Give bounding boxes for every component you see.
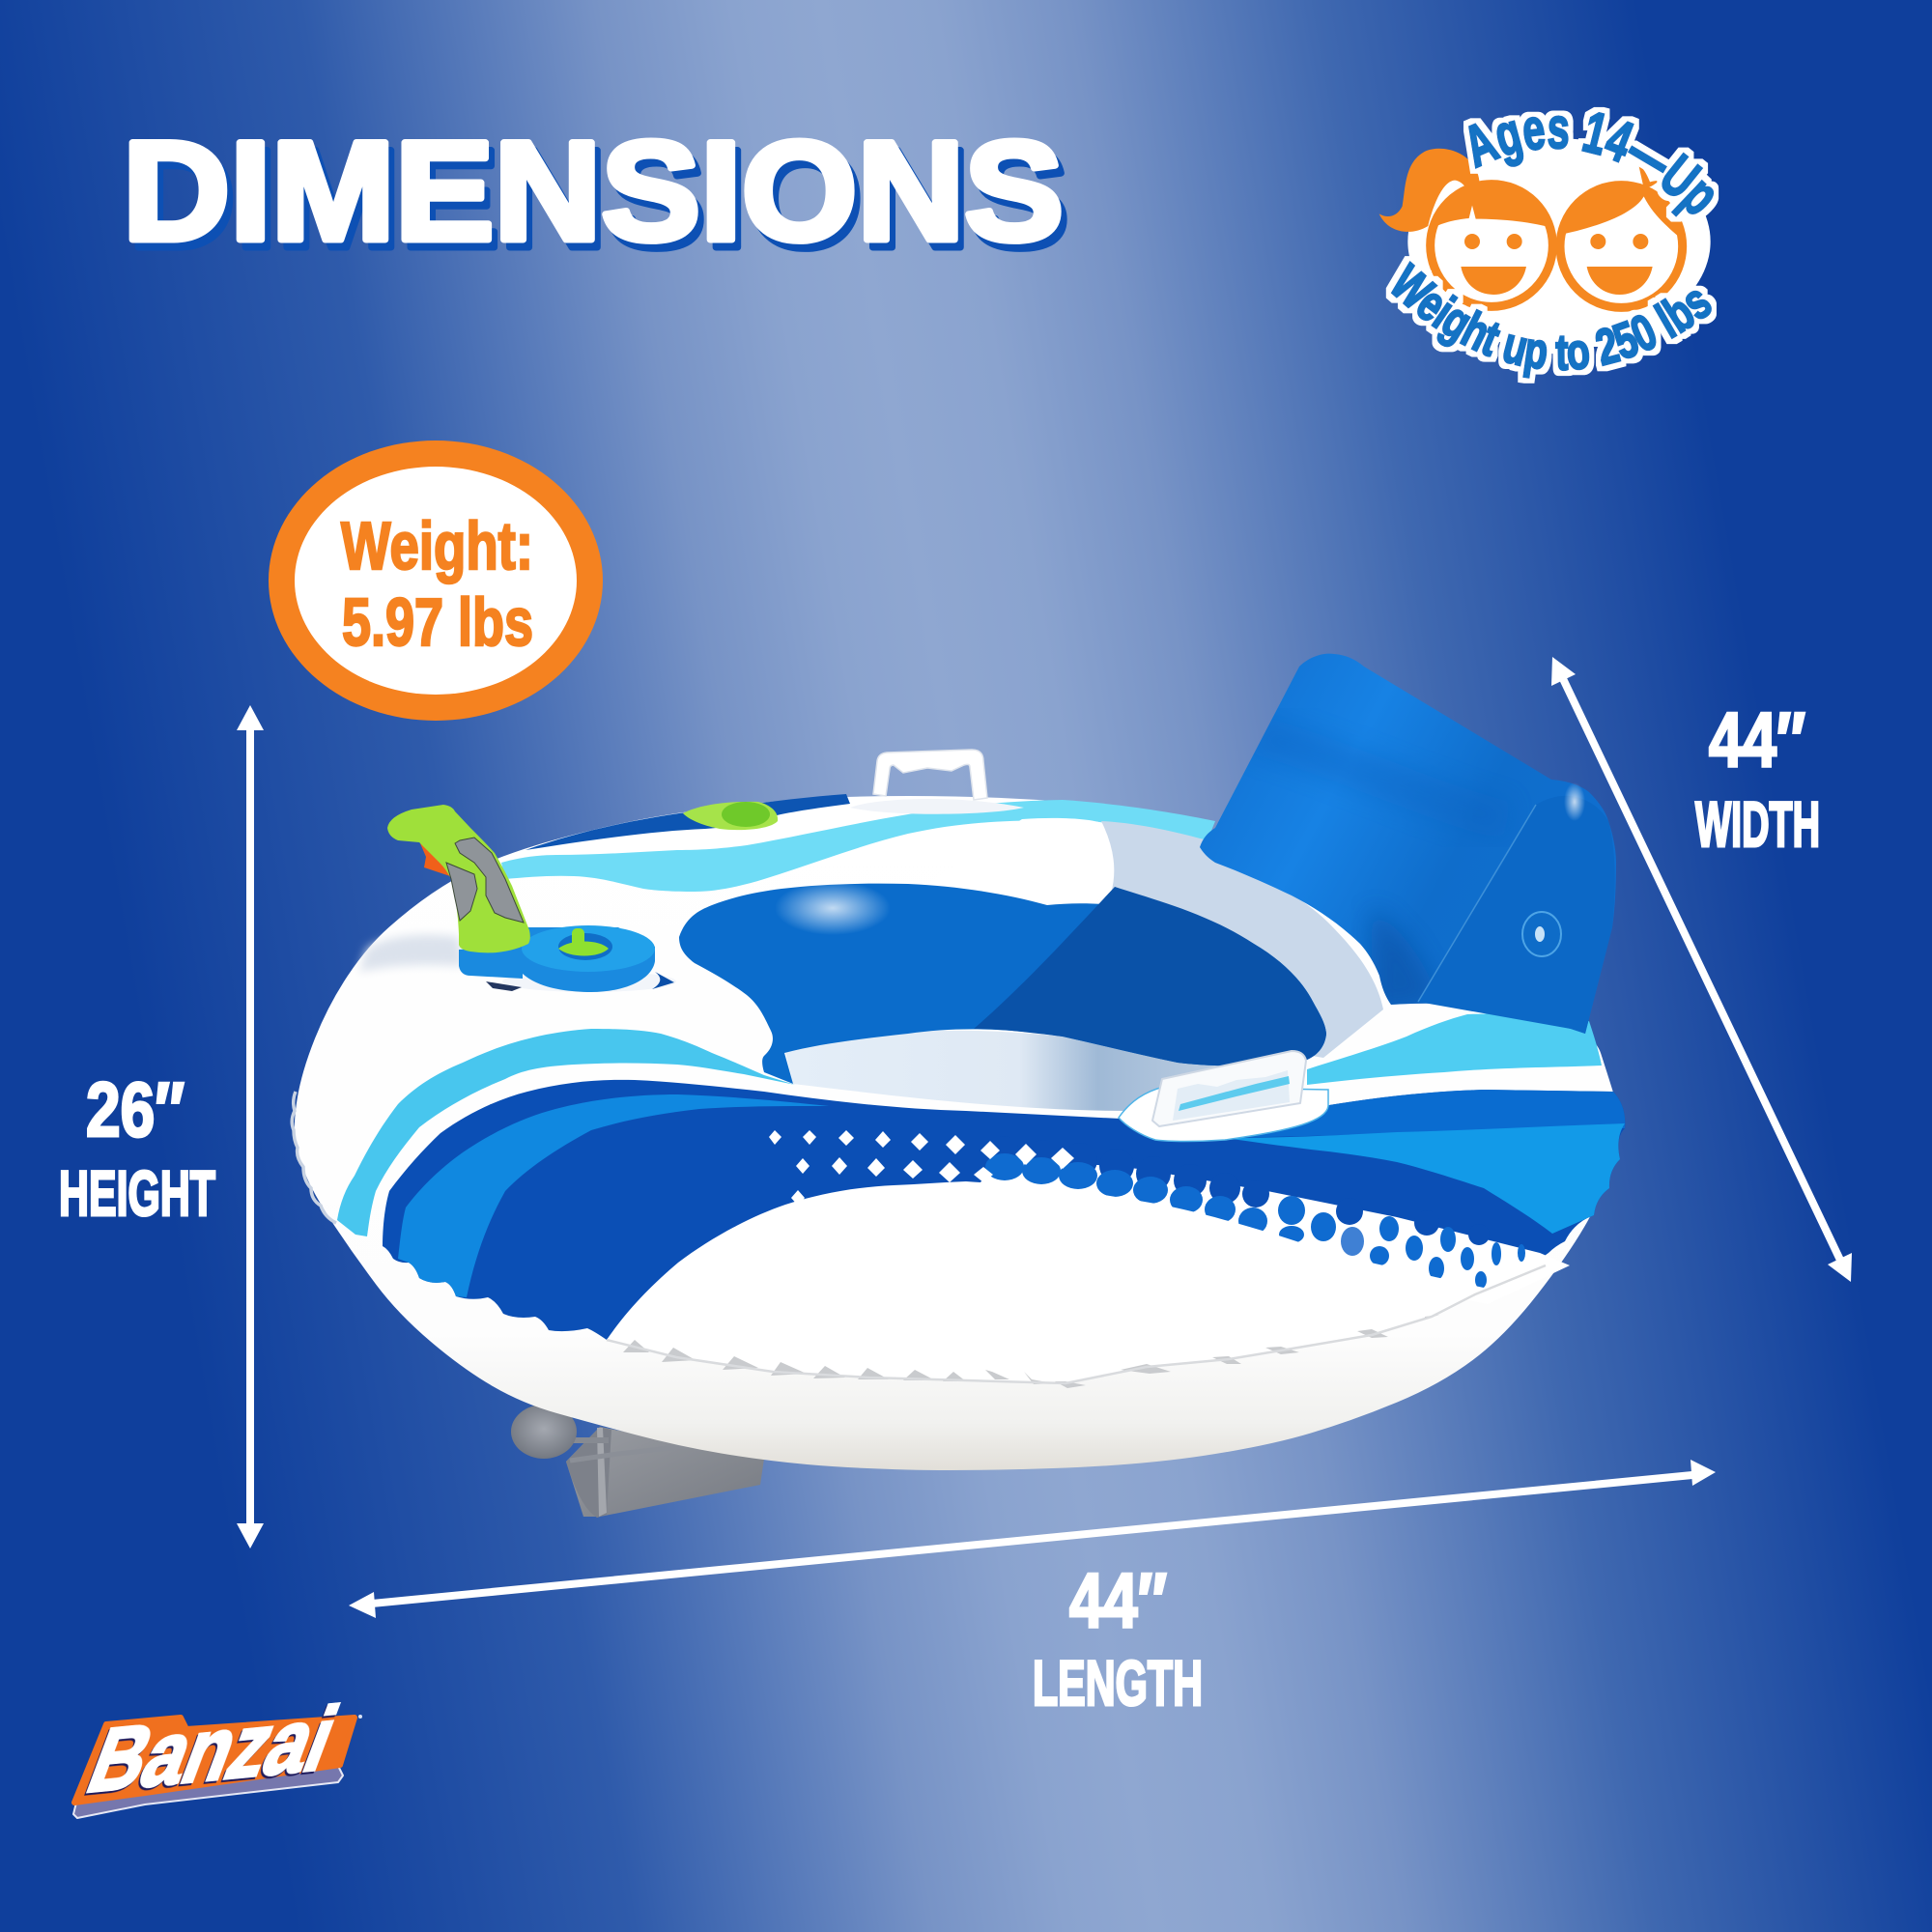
- weight callout: [269, 440, 603, 721]
- weight callout: 5.97 lbs: [342, 584, 533, 660]
- dot pattern band: [966, 1136, 1570, 1304]
- lower white panel: [607, 1181, 1546, 1383]
- green handle: [387, 805, 530, 952]
- top dark stripe: [526, 794, 850, 850]
- backrest: [1200, 654, 1616, 1034]
- right band tone: [1225, 1090, 1625, 1138]
- trigger: [420, 842, 450, 876]
- top cyan stripe: [501, 800, 1215, 892]
- arrow: height: [237, 705, 264, 1548]
- arrow: width: [1551, 657, 1852, 1282]
- water blaster: [387, 805, 676, 992]
- rotating blue base: [459, 925, 655, 992]
- length label: [1033, 1557, 1203, 1719]
- age and weight badge: [1379, 106, 1719, 384]
- height label: [59, 1066, 215, 1229]
- length label: LENGTH: [1033, 1647, 1203, 1719]
- lower cyan stripe: [337, 1029, 795, 1236]
- width label: WIDTH: [1695, 788, 1820, 860]
- blaster opening: [486, 971, 676, 992]
- arrow: length: [349, 1460, 1716, 1618]
- width label: [1695, 696, 1820, 860]
- paddle fin: [511, 1405, 764, 1518]
- weight callout: Weight:: [341, 508, 533, 583]
- weight limit text: Weight up to 250 lbs: [1385, 256, 1717, 384]
- grey grip: [455, 838, 524, 923]
- tube body: [295, 796, 1620, 1470]
- height label: HEIGHT: [59, 1157, 215, 1229]
- seat hole blue: [679, 884, 1326, 1084]
- seat highlight: [775, 881, 891, 935]
- height label: 26″: [86, 1066, 185, 1152]
- medium blue stripe left: [398, 1094, 829, 1297]
- badge face illustration: [1379, 138, 1711, 345]
- width label: 44″: [1709, 696, 1805, 782]
- title: DIMENSIONS: [123, 112, 1064, 270]
- right cyan stripe: [1307, 1013, 1602, 1085]
- top handle: [850, 750, 1024, 814]
- brand logo: Banzai: [75, 1689, 350, 1812]
- seat shadow near joystick: [359, 935, 464, 972]
- main dark blue band: [383, 1080, 1625, 1340]
- white seat swoosh: [927, 818, 1115, 966]
- left edge scallops: [292, 1092, 336, 1223]
- pool tube product: [292, 654, 1625, 1518]
- seam fins: [623, 1315, 1439, 1388]
- seat hole floor: [784, 1031, 1307, 1111]
- seam line: [607, 1265, 1546, 1383]
- pale seat ring: [1101, 821, 1383, 1058]
- cup holder: [683, 802, 778, 830]
- front handle: [1119, 1051, 1328, 1142]
- ages text: Ages 14—Up: [1463, 106, 1719, 222]
- medium blue stripe right: [1225, 1123, 1625, 1234]
- length label: 44″: [1069, 1557, 1167, 1643]
- backrest valve: [1522, 912, 1561, 956]
- white diamonds: [769, 1130, 1074, 1206]
- seat hole shaded side: [974, 887, 1326, 1065]
